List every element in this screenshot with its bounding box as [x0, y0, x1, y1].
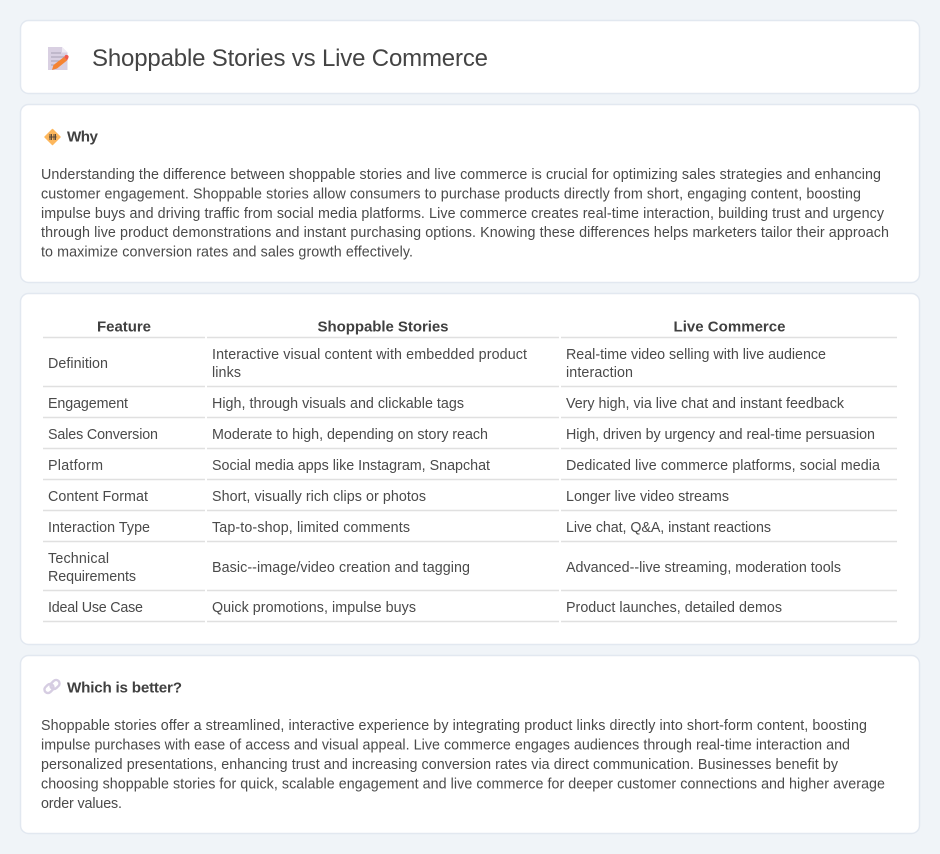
row: engagement: Engagement [48, 396, 128, 412]
row: ideal use case: Quick promotions, impulse buys [212, 600, 416, 616]
table header row: Shoppable Stories [318, 318, 448, 336]
table header row: Feature [97, 318, 151, 336]
panel: why [20, 104, 920, 282]
row: ideal use case: Ideal Use Case [48, 600, 143, 616]
row: definition: Real-time video selling with live audience [566, 347, 826, 363]
panel: comparison table [20, 294, 920, 644]
row: definition [48, 347, 826, 381]
row: interaction type: Interaction Type [48, 520, 150, 536]
icon: chain link [43, 678, 61, 695]
row: sales conversion [48, 427, 875, 443]
row: content format: Longer live video streams [566, 489, 729, 505]
row: ideal use case: Product launches, detailed demos [566, 600, 782, 616]
row: technical requirements: Basic--image/video creation and tagging [212, 560, 470, 576]
row: technical requirements: Technical [48, 551, 109, 567]
row: sales conversion: High, driven by urgency and real-time persuasion [566, 427, 875, 443]
text block: which is better paragraph: order values. [41, 796, 122, 812]
row: technical requirements: Advanced--live streaming, moderation tools [566, 560, 841, 576]
row: definition: interaction [566, 365, 633, 381]
text block: why paragraph: impulse buys and driving traffic from social media platforms. Live commerce creates real-time interaction, building trust and urgency [41, 206, 885, 222]
row: ideal use case [48, 600, 782, 616]
row: engagement: High, through visuals and clickable tags [212, 396, 464, 412]
row: interaction type: Tap-to-shop, limited comments [212, 520, 410, 536]
row: sales conversion: Moderate to high, depending on story reach [212, 427, 488, 443]
row: technical requirements [48, 551, 841, 585]
row: engagement [48, 396, 845, 412]
text block: why paragraph [41, 167, 889, 260]
table header row: Live Commerce [674, 318, 786, 336]
row: engagement: Very high, via live chat and instant feedback [566, 396, 845, 412]
text block: why paragraph: customer engagement. Shoppable stories allow consumers to purchase products directly from short, engaging content, boosting [41, 186, 861, 202]
row: content format: Short, visually rich clips or photos [212, 489, 426, 505]
heading: which is better: Which is better? [67, 680, 182, 696]
text block: why paragraph: through live product demonstrations and instant purchasing options. Knowing these differences helps marketers tailor their approach [41, 225, 889, 241]
table header row [97, 318, 786, 336]
row: content format: Content Format [48, 489, 148, 505]
row: definition: Definition [48, 356, 108, 372]
row: sales conversion: Sales Conversion [48, 427, 158, 443]
icon: document with pencil [48, 47, 69, 70]
row: interaction type: Live chat, Q&A, instant reactions [566, 520, 771, 536]
text block: why paragraph: to maximize conversion rates and sales growth effectively. [41, 244, 413, 260]
row: platform [48, 458, 880, 474]
row: definition: links [212, 365, 241, 381]
row: platform: Social media apps like Instagram, Snapchat [212, 458, 490, 474]
heading: why: Why [67, 128, 99, 146]
text block: which is better paragraph: choosing shoppable stories for quick, scalable engagement and live commerce for deeper customer connections and higher average [41, 776, 885, 792]
panel: which is better [20, 656, 920, 834]
title: Shoppable Stories vs Live Commerce [92, 45, 488, 72]
row: platform: Dedicated live commerce platforms, social media [566, 458, 880, 474]
row: interaction type [48, 520, 771, 536]
row: content format [48, 489, 729, 505]
text block: which is better paragraph: personalized presentations, enhancing trust and increasing conversion rates via direct communication. Businesses benefit by [41, 757, 839, 773]
row: definition: Interactive visual content with embedded product [212, 347, 527, 363]
text block: which is better paragraph: impulse purchases with ease of access and visual appeal. Live commerce engages audiences through real-time interaction and [41, 738, 850, 754]
row: platform: Platform [48, 458, 103, 474]
text block: which is better paragraph [41, 718, 885, 812]
row: technical requirements: Requirements [48, 569, 136, 585]
icon: orange diamond sign [45, 130, 60, 144]
text block: why paragraph: Understanding the difference between shoppable stories and live commerce is crucial for optimizing sales strategies and enhancing [41, 167, 881, 183]
text block: which is better paragraph: Shoppable stories offer a streamlined, interactive experience by integrating product links directly into short-form content, boosting [41, 718, 867, 734]
panel: title header [20, 20, 920, 94]
